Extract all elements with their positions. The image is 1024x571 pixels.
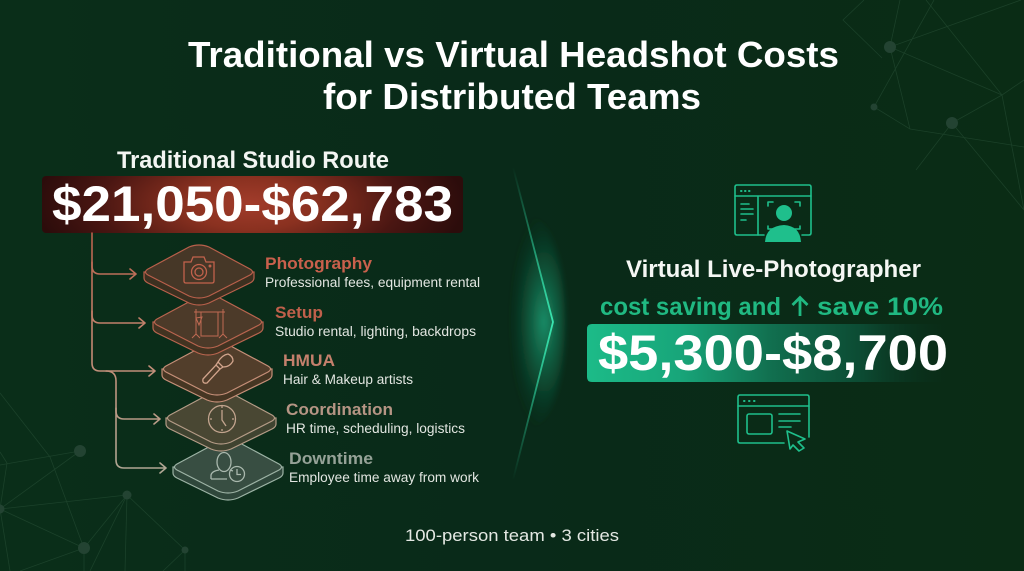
heading: virtual live-photographer: Virtual Live-Photographer xyxy=(626,256,921,283)
label: coordination: Coordination xyxy=(286,401,393,419)
heading: traditional studio route: Traditional Studio Route xyxy=(117,147,389,174)
layer: downtime xyxy=(173,440,283,500)
icon: browser with cursor xyxy=(738,395,809,451)
label: downtime xyxy=(289,450,479,485)
icon: person with clock xyxy=(211,452,244,482)
label: setup: Setup xyxy=(275,304,323,322)
label: hmua xyxy=(283,352,413,387)
label: photography xyxy=(265,255,480,290)
title xyxy=(188,34,839,117)
price banner: virtual cost: $5,300-$8,700 xyxy=(598,325,948,381)
label: hmua: Hair & Makeup artists xyxy=(283,372,413,387)
label: setup xyxy=(275,304,476,339)
title: for Distributed Teams xyxy=(323,76,701,117)
arrow: chevron divider xyxy=(499,167,565,480)
label: downtime: Downtime xyxy=(289,450,373,468)
icon: virtual session window xyxy=(735,185,811,242)
label: downtime: Employee time away from work xyxy=(289,470,479,485)
icon: up arrow xyxy=(792,298,808,316)
price banner: traditional cost: $21,050-$62,783 xyxy=(52,176,453,232)
label: coordination xyxy=(286,401,465,436)
layer: hmua xyxy=(162,342,272,402)
title: Traditional vs Virtual Headshot Costs xyxy=(188,34,839,75)
icon: camera xyxy=(184,257,214,283)
label: photography: Photography xyxy=(265,255,373,273)
icon: backdrop stand xyxy=(192,309,227,338)
layer: photography xyxy=(144,245,254,305)
icon: makeup brush xyxy=(203,354,233,383)
connector arrows xyxy=(92,233,166,473)
label: coordination: HR time, scheduling, logistics xyxy=(286,421,465,436)
text: cost saving xyxy=(600,293,943,321)
label: hmua: HMUA xyxy=(283,352,335,370)
icon: clock xyxy=(208,406,236,432)
label: photography: Professional fees, equipment rental xyxy=(265,275,480,290)
layer: setup xyxy=(153,295,263,355)
footer note: 100-person team • 3 cities xyxy=(405,526,619,545)
text: cost saving: save 10% xyxy=(817,293,943,321)
label: setup: Studio rental, lighting, backdrops xyxy=(275,324,476,339)
layer: coordination xyxy=(166,391,276,451)
text: cost saving: cost saving and xyxy=(600,293,781,321)
